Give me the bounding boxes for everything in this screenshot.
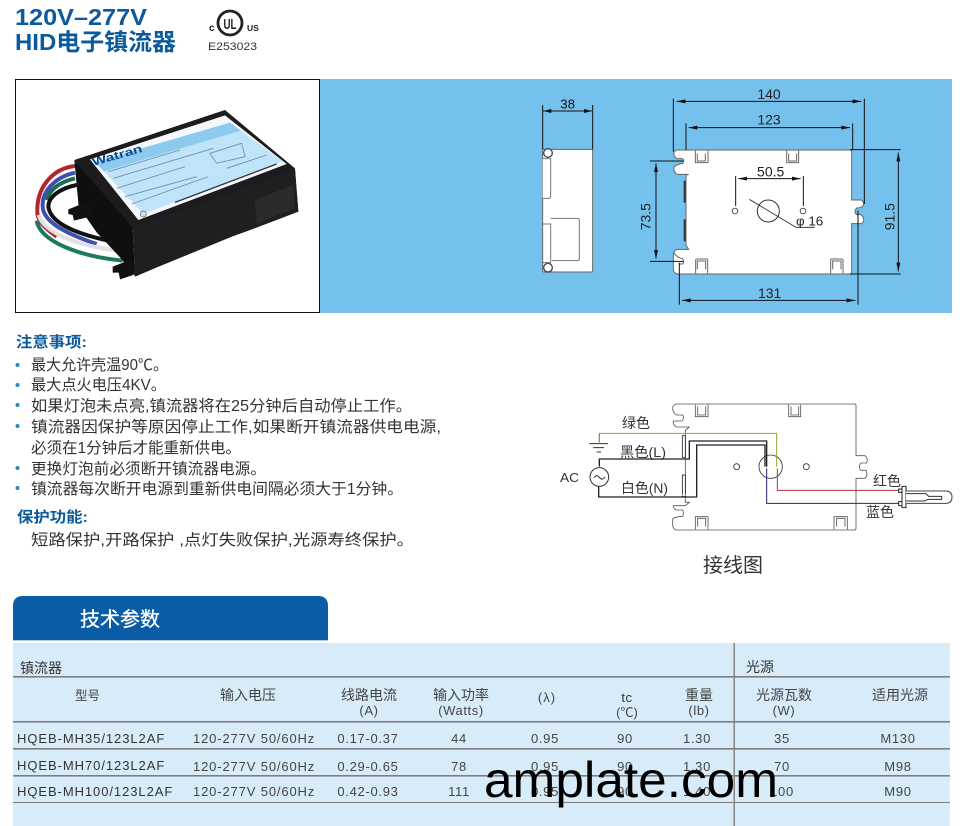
front view plate (673, 150, 864, 274)
column headers: 光源瓦数 (756, 687, 812, 703)
lamp (899, 486, 906, 508)
column headers: (lb) (688, 703, 710, 718)
row 1: 120-277V 50/60Hz (193, 731, 315, 746)
row 2 (17, 758, 912, 774)
row 1: 35 (774, 731, 790, 746)
table rules (13, 643, 950, 826)
label (90, 115, 287, 220)
row 2: 120-277V 50/60Hz (193, 759, 315, 774)
row 2: 1.30 (683, 759, 711, 774)
row 3: 90 (617, 784, 633, 799)
row 2: M98 (884, 759, 912, 774)
front view plate: φ 16 (796, 213, 823, 228)
group headers (20, 659, 774, 676)
text block: precautions: 镇流器每次断开电源到重新供电间隔必须大于1分钟。 (31, 480, 403, 498)
group headers: 镇流器 (20, 660, 62, 676)
title (15, 4, 176, 55)
row 1: 1.30 (683, 731, 711, 746)
wiring diagram (560, 404, 952, 577)
row 1: HQEB-MH35/123L2AF (17, 731, 165, 746)
text block: precautions: 镇流器因保护等原因停止工作,如果断开镇流器供电电源, (31, 418, 441, 436)
text block: protection functions: 短路保护,开路保护 ,点灯失败保护,光源寿终保护。 (31, 531, 414, 549)
row 1: M130 (880, 731, 916, 746)
row 1: 0.95 (531, 731, 559, 746)
column headers (75, 687, 928, 720)
panel: product photo (16, 80, 320, 312)
dimension labels: 131 (758, 285, 782, 301)
row 3: 1.40 (683, 784, 711, 799)
row 2: HQEB-MH70/123L2AF (17, 758, 165, 773)
column headers: 重量 (685, 687, 713, 703)
dimension labels: 73.5 (637, 203, 653, 230)
row 3: 111 (448, 784, 470, 799)
row 2: 78 (451, 759, 467, 774)
wire labels (560, 415, 901, 520)
wire labels: AC (560, 470, 579, 485)
wire labels: 白色(N) (621, 480, 668, 496)
wire labels: 绿色 (622, 415, 650, 431)
dimension lines (650, 99, 901, 305)
row 1 (17, 731, 916, 746)
row 2: 70 (774, 759, 790, 774)
text block: precautions (16, 333, 441, 498)
row 3: 120-277V 50/60Hz (193, 784, 315, 799)
row 2: 90 (617, 759, 633, 774)
text block: protection functions: 保护功能: (17, 508, 88, 526)
column headers: 适用光源 (872, 687, 928, 703)
section tab (13, 596, 328, 641)
wire labels: 蓝色 (866, 504, 894, 520)
column headers: 输入电压 (220, 687, 276, 703)
section tab: 技术参数 (80, 608, 160, 631)
side view: 38 (560, 97, 575, 112)
panel: product photo: Watran (91, 143, 144, 169)
dimension labels: 91.5 (882, 203, 898, 230)
panel: dimension drawings (320, 79, 952, 313)
wires (599, 433, 777, 467)
icon: UL certification mark: UL (224, 16, 236, 33)
row 3: 0.95 (531, 784, 559, 799)
icon: UL certification mark (208, 11, 259, 53)
title: HID电子镇流器 (15, 29, 176, 55)
text block: precautions: 如果灯泡未点亮,镇流器将在25分钟后自动停止工作。 (31, 397, 412, 415)
title: 120V–277V (15, 4, 148, 30)
icon: UL certification mark: c (209, 23, 215, 34)
column headers: (W) (773, 703, 795, 718)
row 3: 0.42-0.93 (337, 784, 399, 799)
mounting tabs (68, 203, 93, 221)
front panel detail (255, 185, 295, 223)
row 3: HQEB-MH100/123L2AF (17, 784, 173, 799)
wires (37, 166, 123, 261)
row 1: 0.17-0.37 (337, 731, 399, 746)
text block: precautions: 最大允许壳温90℃。 (31, 356, 168, 374)
column headers: 输入功率 (433, 687, 489, 703)
watermark: amplate.com (484, 752, 778, 808)
row 2: 0.95 (531, 759, 559, 774)
side view (543, 97, 593, 272)
column headers: (℃) (616, 705, 638, 720)
row 2: 0.29-0.65 (337, 759, 399, 774)
group headers: 光源 (746, 659, 774, 675)
row 3: 100 (770, 784, 794, 799)
column headers: tc (621, 690, 633, 705)
AC source (590, 468, 609, 486)
row 3: M90 (884, 784, 912, 799)
wire labels: 黑色(L) (620, 444, 666, 460)
dimension labels (637, 86, 898, 301)
text block: precautions: 更换灯泡前必须断开镇流器电源。 (31, 460, 266, 478)
caption: 接线图 (703, 554, 763, 577)
column headers: (λ) (538, 690, 556, 705)
ballast body (74, 110, 298, 277)
column headers: 线路电流 (341, 687, 397, 703)
dimension labels: 140 (757, 86, 781, 102)
table (13, 643, 950, 826)
column headers: (Watts) (438, 703, 484, 718)
wire labels: 红色 (873, 473, 901, 489)
row 1: 90 (617, 731, 633, 746)
text block: protection functions (17, 508, 414, 549)
column headers: (A) (359, 703, 379, 718)
ground symbol (589, 433, 608, 452)
dimension labels: 50.5 (757, 164, 784, 180)
text block: precautions: 最大点火电压4KV。 (31, 376, 166, 394)
dimension labels: 123 (757, 111, 781, 127)
row 3 (17, 784, 912, 799)
row 1: 44 (451, 731, 467, 746)
heading: precautions: 注意事项: (16, 333, 87, 351)
icon: UL certification mark: US (247, 23, 259, 33)
text block: precautions: 必须在1分钟后才能重新供电。 (31, 439, 241, 457)
column headers: 型号 (75, 689, 100, 703)
icon: UL certification mark: E253023 (208, 41, 257, 53)
